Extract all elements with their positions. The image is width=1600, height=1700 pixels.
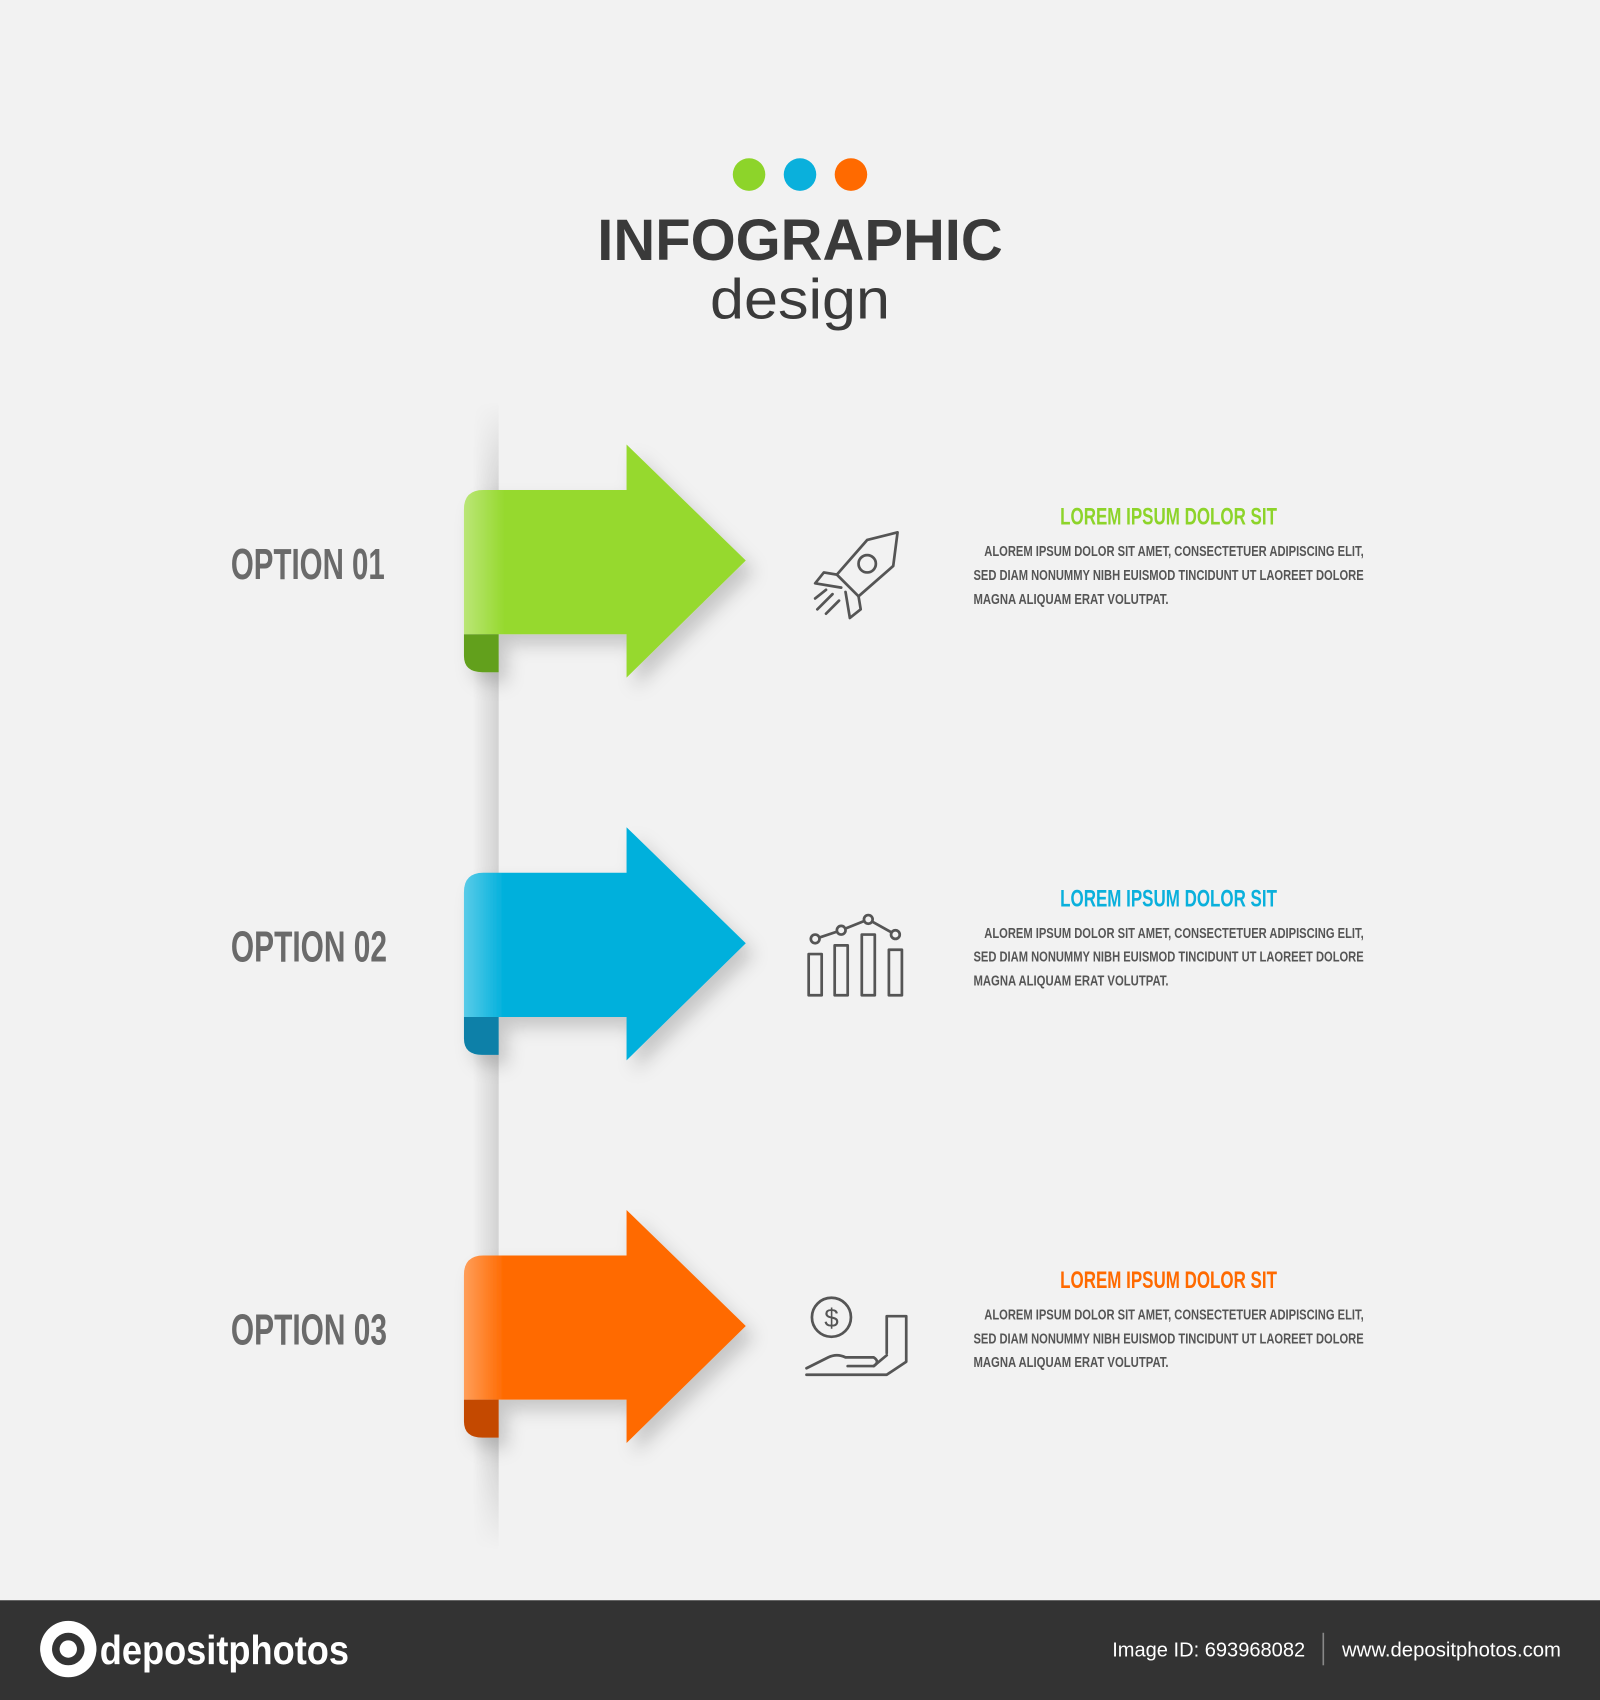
header dots [733,158,867,191]
option 1: MAGNA ALIQUAM ERAT VOLUTPAT. [973,591,1169,608]
option 1: ALOREM IPSUM DOLOR SIT AMET, CONSECTETUER ADIPISCING ELIT, [984,543,1364,560]
arrow orange [464,1210,746,1443]
option 3: MAGNA ALIQUAM ERAT VOLUTPAT. [973,1354,1169,1371]
footer info [1112,1633,1561,1665]
option 2: ALOREM IPSUM DOLOR SIT AMET, CONSECTETUER ADIPISCING ELIT, [984,925,1364,942]
option 3: ALOREM IPSUM DOLOR SIT AMET, CONSECTETUER ADIPISCING ELIT, [984,1306,1364,1323]
icon rocket [815,532,898,618]
footer logo [40,1621,349,1677]
footer info: www.depositphotos.com [1341,1639,1561,1662]
text block 2: LOREM IPSUM DOLOR SIT [1060,885,1277,912]
option label 2: OPTION 02 [231,924,387,972]
arrow green [464,445,746,678]
option label 1: OPTION 01 [231,541,385,589]
arrow blue [464,827,746,1060]
title: design [710,268,890,331]
option 2: SED DIAM NONUMMY NIBH EUISMOD TINCIDUNT UT LAOREET DOLORE [973,949,1364,966]
option 1: SED DIAM NONUMMY NIBH EUISMOD TINCIDUNT UT LAOREET DOLORE [973,567,1364,584]
footer logo: depositphotos [100,1627,349,1673]
title: INFOGRAPHIC [597,208,1003,273]
option 3: SED DIAM NONUMMY NIBH EUISMOD TINCIDUNT UT LAOREET DOLORE [973,1330,1364,1347]
option 2: MAGNA ALIQUAM ERAT VOLUTPAT. [973,973,1169,990]
icon hand with dollar: $ [824,1303,839,1333]
option 1 [231,445,1364,678]
text block 1: LOREM IPSUM DOLOR SIT [1060,504,1277,531]
icon hand with dollar [807,1298,906,1375]
vertical timeline line [480,425,499,1527]
icon bar chart [809,915,902,995]
option 2 [231,827,1364,1060]
text block 3: LOREM IPSUM DOLOR SIT [1060,1267,1277,1294]
option label 3: OPTION 03 [231,1306,387,1354]
option 3 [231,1210,1364,1443]
footer info: Image ID: 693968082 [1112,1639,1305,1662]
title [597,208,1003,331]
footer bar [0,1600,1600,1700]
